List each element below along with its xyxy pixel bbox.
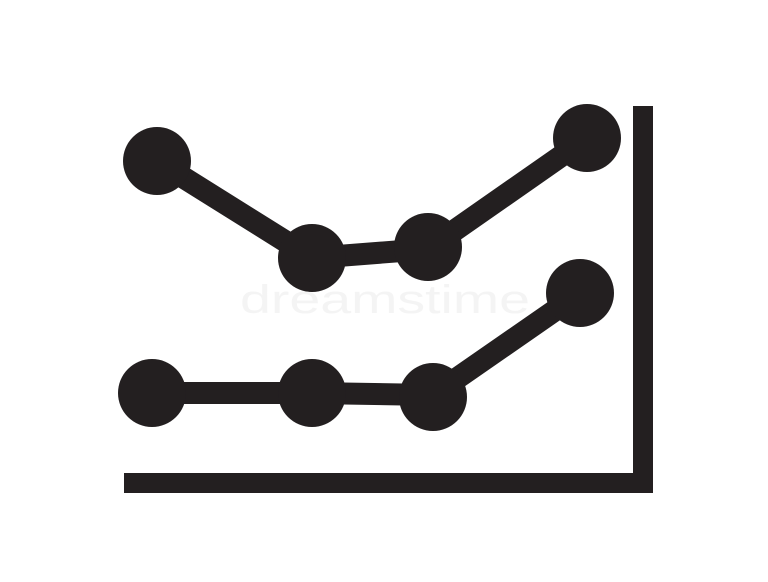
upper line series	[123, 104, 621, 292]
watermark: dreamstime	[240, 278, 530, 322]
axes	[124, 106, 653, 493]
lower line series	[118, 259, 614, 431]
